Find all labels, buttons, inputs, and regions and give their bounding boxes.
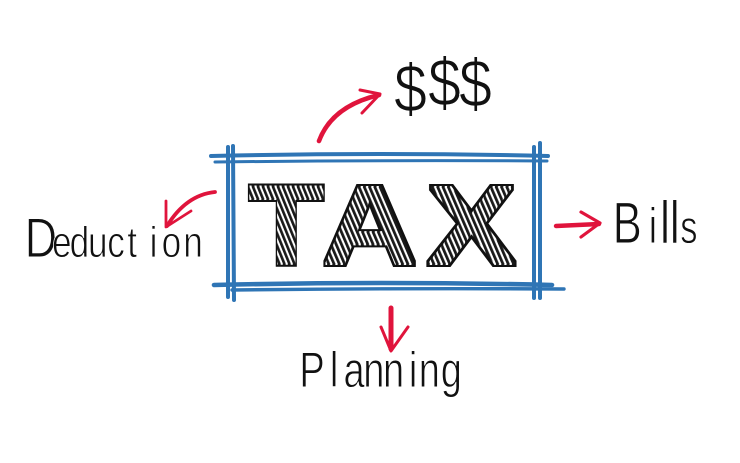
label: $$$ (394, 47, 492, 127)
label: Planning: n (363, 343, 384, 398)
arrow: to Planning (381, 308, 408, 351)
label: Planning: g (441, 343, 462, 398)
label: Planning: l (330, 343, 338, 398)
label: Deduction: n (183, 218, 203, 267)
arrow: to Bills (556, 212, 600, 237)
label: Planning: a (344, 343, 365, 398)
title: TAX hatched lettering: T (248, 163, 325, 288)
label: Planning: P (299, 343, 325, 398)
label: Bills: l (670, 190, 680, 257)
label: Bills: B (613, 191, 642, 255)
label: Planning: n (383, 343, 404, 398)
label: Deduction: o (162, 218, 181, 267)
title: TAX hatched lettering: A (322, 163, 417, 288)
label: Deduction: d (70, 218, 89, 267)
arrow: to $$$ (319, 90, 380, 141)
label: Bills: l (660, 190, 670, 257)
label: Bills: i (649, 199, 657, 254)
label: Planning: n (419, 343, 440, 398)
label: $$$: $ (428, 47, 461, 121)
label: $$$: $ (459, 48, 492, 122)
label: Deduction: c (107, 218, 125, 267)
label: Deduction: i (150, 218, 157, 267)
title: TAX hatched lettering: X (427, 164, 516, 289)
title: TAX hatched lettering (248, 163, 516, 289)
blue sketched frame (211, 143, 564, 300)
label: Planning: i (409, 343, 417, 398)
label: Deduction: e (52, 218, 72, 267)
label: $$$: $ (394, 53, 427, 127)
label: Bills: s (680, 201, 697, 253)
label: Deduction: t (127, 218, 137, 267)
arrow: to Deduction (166, 192, 215, 227)
label: Deduction: u (88, 218, 108, 267)
label: Deduction: D (25, 206, 57, 269)
